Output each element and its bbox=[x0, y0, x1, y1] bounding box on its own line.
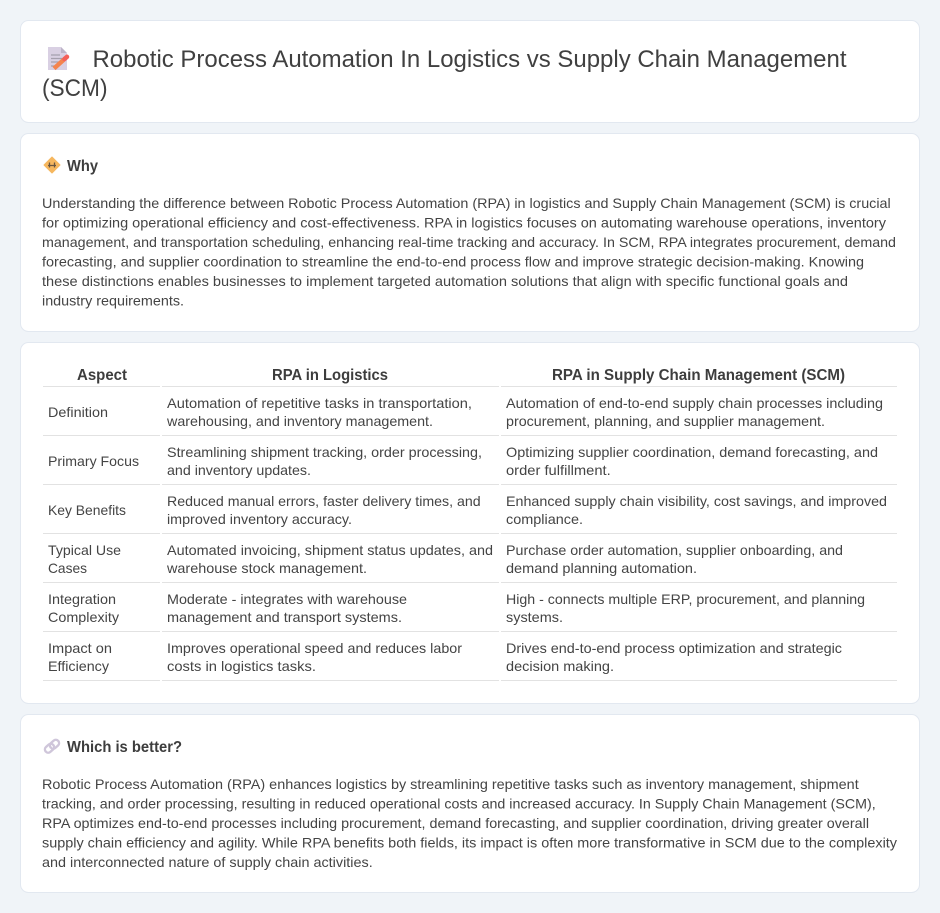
row: definition: procurement, planning, and supplier management. bbox=[506, 413, 825, 429]
row: definition: Automation of end-to-end supply chain processes including bbox=[506, 395, 883, 411]
which is better paragraph bbox=[42, 776, 897, 870]
heading: why: Why bbox=[67, 158, 98, 175]
row: key benefits bbox=[43, 493, 897, 534]
row: typical use cases: Typical Use bbox=[48, 542, 121, 558]
why paragraph: Understanding the difference between Robotic Process Automation (RPA) in logistics and Supply Chain Management (SCM) is crucial bbox=[42, 195, 891, 211]
row: definition: Definition bbox=[48, 404, 108, 420]
panel: why bbox=[20, 134, 920, 332]
why paragraph: these distinctions enables businesses to implement targeted automation solutions that align with specific functional goals and bbox=[42, 273, 848, 289]
table header row: RPA in Logistics bbox=[272, 367, 388, 384]
row: definition: Automation of repetitive tasks in transportation, bbox=[167, 395, 472, 411]
which is better paragraph: tracking, and order processing, resulting in reduced operational costs and increased accuracy. In Supply Chain Management (SCM), bbox=[42, 796, 876, 812]
row: definition: warehousing, and inventory management. bbox=[166, 413, 433, 429]
table header row: Aspect bbox=[77, 367, 127, 384]
row: primary focus: Primary Focus bbox=[48, 453, 139, 469]
row: integration complexity: Complexity bbox=[48, 609, 119, 625]
row: definition bbox=[43, 395, 897, 436]
panel: which is better bbox=[20, 714, 920, 892]
panel: comparison table bbox=[20, 342, 920, 704]
row: key benefits: improved inventory accuracy. bbox=[167, 511, 352, 527]
table header row bbox=[43, 367, 897, 387]
row: primary focus bbox=[43, 444, 897, 485]
row: typical use cases: Purchase order automation, supplier onboarding, and bbox=[506, 542, 843, 558]
row: primary focus: Streamlining shipment tracking, order processing, bbox=[167, 444, 482, 460]
why paragraph: for optimizing operational efficiency and cost-effectiveness. RPA in logistics focuses on automating warehouse operations, inventory bbox=[42, 214, 886, 230]
icon: memo with pencil bbox=[48, 47, 67, 70]
row: primary focus: and inventory updates. bbox=[167, 462, 311, 478]
row: integration complexity: systems. bbox=[506, 609, 563, 625]
row: typical use cases bbox=[43, 542, 897, 583]
row: integration complexity: Moderate - integrates with warehouse bbox=[167, 591, 407, 607]
title text: (SCM) bbox=[42, 75, 108, 102]
row: impact on efficiency: Efficiency bbox=[48, 658, 109, 674]
which is better paragraph: RPA optimizes end-to-end processes including procurement, demand forecasting, and supplier coordination, driving greater overall bbox=[42, 815, 869, 831]
row: integration complexity bbox=[43, 591, 897, 632]
row: impact on efficiency: decision making. bbox=[506, 658, 614, 674]
row: impact on efficiency: Impact on bbox=[48, 640, 112, 656]
panel: title bbox=[20, 20, 920, 122]
heading: which is better: Which is better? bbox=[67, 739, 182, 756]
which is better paragraph: and interconnected nature of supply chain activities. bbox=[42, 854, 373, 870]
row: typical use cases: Automated invoicing, shipment status updates, and bbox=[167, 542, 493, 558]
row: impact on efficiency: costs in logistics tasks. bbox=[167, 658, 316, 674]
row: typical use cases: warehouse stock management. bbox=[166, 560, 367, 576]
which is better paragraph: supply chain efficiency and agility. While RPA benefits both fields, its impact is often more transformative in SCM due to the complexity bbox=[42, 834, 897, 850]
row: integration complexity: High - connects multiple ERP, procurement, and planning bbox=[506, 591, 865, 607]
title text: Robotic Process Automation In Logistics vs Supply Chain Management bbox=[92, 46, 847, 73]
why paragraph: forecasting, and supplier coordination to streamline the end-to-end process flow and improve strategic decision-making. Knowing bbox=[42, 254, 864, 270]
icon: chain link bbox=[44, 738, 60, 754]
row: typical use cases: Cases bbox=[48, 560, 87, 576]
which is better paragraph: Robotic Process Automation (RPA) enhances logistics by streamlining repetitive tasks such as inventory management, shipment bbox=[42, 776, 859, 792]
row: primary focus: Optimizing supplier coordination, demand forecasting, and bbox=[506, 444, 878, 460]
why paragraph bbox=[42, 195, 896, 308]
why paragraph: industry requirements. bbox=[42, 292, 184, 308]
row: impact on efficiency bbox=[43, 640, 897, 681]
icon: warning diamond bbox=[44, 157, 60, 173]
row: impact on efficiency: Drives end-to-end process optimization and strategic bbox=[506, 640, 842, 656]
row: key benefits: Reduced manual errors, faster delivery times, and bbox=[167, 493, 481, 509]
why paragraph: management, and transportation scheduling, enhancing real-time tracking and accuracy. In SCM, RPA integrates procurement, demand bbox=[42, 234, 896, 250]
row: primary focus: order fulfillment. bbox=[506, 462, 611, 478]
row: key benefits: Enhanced supply chain visibility, cost savings, and improved bbox=[506, 493, 887, 509]
row: key benefits: compliance. bbox=[506, 511, 583, 527]
row: typical use cases: demand planning automation. bbox=[506, 560, 697, 576]
table header row: RPA in Supply Chain Management (SCM) bbox=[552, 367, 845, 384]
row: key benefits: Key Benefits bbox=[48, 502, 126, 518]
row: impact on efficiency: Improves operational speed and reduces labor bbox=[167, 640, 462, 656]
row: integration complexity: management and transport systems. bbox=[167, 609, 402, 625]
title text bbox=[42, 46, 847, 102]
row: integration complexity: Integration bbox=[48, 591, 116, 607]
